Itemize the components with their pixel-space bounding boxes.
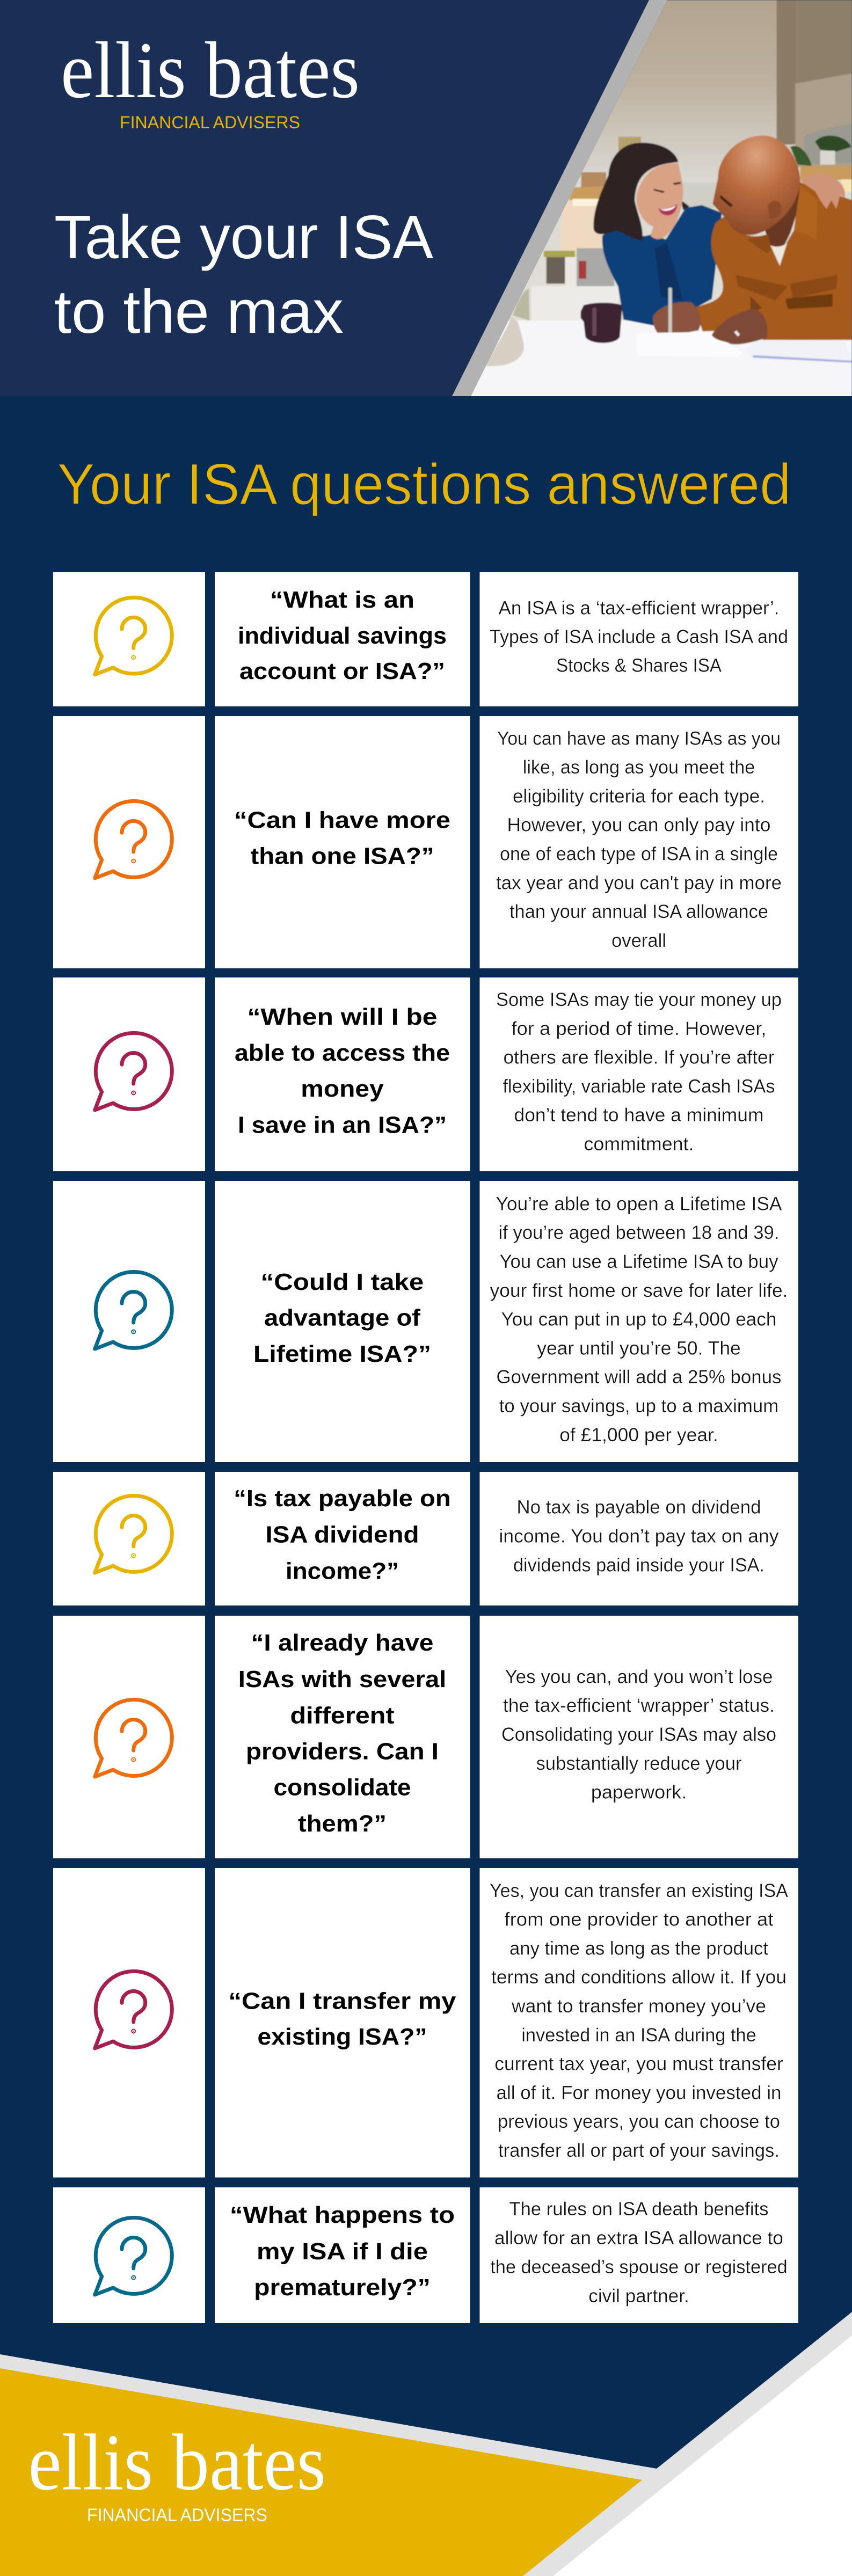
hair (594, 143, 678, 240)
answer 3: commitment. (584, 1134, 694, 1155)
question 7: existing ISA?” (258, 2024, 427, 2050)
panel: question cell 8 (215, 2187, 470, 2323)
answer 8: allow for an extra ISA allowance to (494, 2228, 783, 2249)
answer 3: for a period of time. However, (511, 1018, 767, 1039)
panel: answer cell 6 (480, 1616, 798, 1858)
answer 7: previous years, you can choose to (498, 2111, 780, 2132)
question 4: Lifetime ISA?” (253, 1341, 431, 1367)
answer 7: any time as long as the product (509, 1938, 768, 1959)
title (54, 203, 433, 346)
panel: question cell 1 (215, 572, 470, 706)
question 8: prematurely?” (254, 2274, 431, 2301)
question 4: advantage of (264, 1304, 420, 1331)
row 1 (53, 572, 798, 706)
question 3: I save in an ISA?” (238, 1112, 447, 1138)
question 7: “Can I transfer my (229, 1988, 456, 2015)
question 5: ISA dividend (265, 1522, 419, 1548)
panel: answer cell 5 (480, 1472, 798, 1606)
answer 6: paperwork. (591, 1782, 687, 1803)
row 6 (53, 1616, 798, 1858)
logo: ellis bates financial advisers: FINANCIAL ADVISERS (120, 113, 300, 132)
panel: answer cell 1 (480, 572, 798, 706)
answer 1: Types of ISA include a Cash ISA and (490, 626, 788, 647)
answer 7: invested in an ISA during the (521, 2025, 756, 2046)
footer logo: FINANCIAL ADVISERS (87, 2505, 267, 2525)
question 6: consolidate (274, 1775, 411, 1800)
panel: icon cell 7 (53, 1868, 205, 2177)
answer 7: from one provider to another at (505, 1909, 774, 1930)
answer 4: Government will add a 25% bonus (496, 1367, 782, 1388)
face (636, 163, 683, 239)
answer 7: Yes, you can transfer an existing ISA (490, 1880, 789, 1901)
answer 4: to your savings, up to a maximum (499, 1396, 778, 1417)
question 2: “Can I have more (234, 807, 450, 833)
answer 5 (499, 1497, 779, 1576)
icon: teal question bubble (95, 1272, 172, 1349)
answer 4: You can use a Lifetime ISA to buy (499, 1251, 778, 1272)
question 6: them?” (298, 1811, 387, 1837)
question 2 (234, 807, 450, 870)
answer 2: You can have as many ISAs as you (497, 728, 781, 749)
question 6: providers. Can I (246, 1738, 439, 1765)
section heading: Your ISA questions answered (57, 451, 791, 516)
answer 8 (490, 2199, 788, 2307)
answer 4: your first home or save for later life. (490, 1280, 788, 1301)
answer 4: You can put in up to £4,000 each (501, 1309, 776, 1330)
panel: icon cell 1 (53, 572, 205, 706)
grey diagonal band (452, 0, 667, 396)
answer 7: current tax year, you must transfer (494, 2054, 783, 2075)
woman's hand on shoulder (800, 173, 845, 209)
row 7 (53, 1868, 798, 2177)
answer 8: the deceased’s spouse or registered (490, 2257, 788, 2278)
answer 6 (501, 1666, 776, 1803)
question 6: ISAs with several (238, 1666, 446, 1692)
icon: teal question bubble (95, 2217, 172, 2295)
question 3: “When will I be (247, 1004, 437, 1030)
question 1: “What is an (270, 587, 414, 613)
panel: answer cell 8 (480, 2187, 798, 2323)
answer 3 (496, 989, 782, 1155)
answer 7 (490, 1880, 789, 2161)
other hand (712, 309, 768, 345)
question 1: account or ISA?” (239, 658, 445, 684)
answer 2: However, you can only pay into (507, 815, 771, 836)
blouse (602, 205, 722, 325)
panel: answer cell 2 (480, 716, 798, 968)
question 4 (253, 1269, 431, 1367)
answer 2 (496, 728, 782, 951)
question 3: money (301, 1076, 384, 1102)
icon: crimson question bubble (95, 1033, 172, 1110)
question 5: “Is tax payable on (234, 1485, 451, 1512)
question 4: “Could I take (261, 1269, 424, 1295)
header panel background (0, 0, 852, 396)
question 1: individual savings (238, 623, 447, 649)
panel: question cell 6 (215, 1616, 470, 1858)
question 8: my ISA if I die (257, 2238, 428, 2265)
answer 2: overall (611, 930, 666, 951)
question 3: able to access the (235, 1040, 450, 1066)
writing hand (653, 302, 701, 337)
question 8: “What happens to (230, 2202, 455, 2228)
footer grey band (0, 2312, 852, 2576)
question 3 (235, 1004, 450, 1138)
panel: question cell 3 (215, 977, 470, 1171)
answer 3: Some ISAs may tie your money up (496, 989, 782, 1010)
panel: question cell 5 (215, 1472, 470, 1606)
panel: answer cell 7 (480, 1868, 798, 2177)
answer 3: don’t tend to have a minimum (514, 1105, 763, 1126)
answer 2: like, as long as you meet the (523, 757, 755, 778)
question 2: than one ISA?” (250, 843, 434, 870)
question 8 (230, 2202, 455, 2301)
panel: icon cell 5 (53, 1472, 205, 1606)
mug (581, 303, 622, 343)
answer 8: civil partner. (588, 2286, 689, 2307)
icon: orange question bubble (95, 1699, 172, 1777)
answer 4 (490, 1193, 788, 1446)
title: to the max (54, 278, 344, 346)
answer 5: dividends paid inside your ISA. (513, 1555, 764, 1576)
answer 8: The rules on ISA death benefits (509, 2199, 769, 2220)
question 6: “I already have (251, 1630, 434, 1656)
answer 6: Yes you can, and you won’t lose (505, 1666, 773, 1687)
answer 1: An ISA is a ‘tax-efficient wrapper’. (498, 598, 780, 618)
answer 3: flexibility, variable rate Cash ISAs (503, 1076, 775, 1097)
answer 7: transfer all or part of your savings. (498, 2140, 780, 2161)
footer yellow panel (0, 2368, 642, 2576)
row 8 (53, 2187, 798, 2323)
icon: crimson question bubble (95, 1971, 172, 2048)
answer 7: terms and conditions allow it. If you (491, 1967, 787, 1988)
answer 1: Stocks & Shares ISA (556, 655, 722, 676)
row 5 (53, 1472, 798, 1606)
answer 2: one of each type of ISA in a single (500, 844, 778, 864)
question 7 (229, 1988, 456, 2050)
question 5: income?” (286, 1558, 399, 1585)
panel: answer cell 3 (480, 977, 798, 1171)
panel: icon cell 2 (53, 716, 205, 968)
answer 5: No tax is payable on dividend (516, 1497, 761, 1517)
title: Take your ISA (54, 203, 433, 272)
answer 3: others are flexible. If you’re after (504, 1047, 775, 1068)
answer 6: Consolidating your ISAs may also (501, 1724, 776, 1745)
answer 4: of £1,000 per year. (559, 1425, 718, 1446)
panel: question cell 2 (215, 716, 470, 968)
logo: ellis bates financial advisers: ellis bates (61, 26, 360, 115)
row 4 (53, 1181, 798, 1462)
panel: icon cell 8 (53, 2187, 205, 2323)
answer 2: eligibility criteria for each type. (513, 786, 765, 807)
icon: orange question bubble (95, 801, 172, 878)
answer 4: year until you’re 50. The (537, 1338, 741, 1359)
panel: icon cell 3 (53, 977, 205, 1171)
panel: icon cell 4 (53, 1181, 205, 1462)
question 6 (238, 1630, 446, 1837)
row 3 (53, 977, 798, 1171)
panel: question cell 4 (215, 1181, 470, 1462)
answer 7: want to transfer money you’ve (511, 1996, 766, 2017)
head (712, 135, 800, 235)
answer 4: You’re able to open a Lifetime ISA (496, 1193, 782, 1214)
panel: question cell 7 (215, 1868, 470, 2177)
footer logo: ellis bates (28, 2418, 326, 2507)
question 5 (234, 1485, 451, 1585)
papers (657, 331, 689, 338)
question 1 (238, 587, 447, 684)
panel: icon cell 6 (53, 1616, 205, 1858)
answer 2: than your annual ISA allowance (509, 901, 768, 922)
shirt (695, 183, 852, 340)
icon: yellow question bubble (95, 1495, 172, 1573)
man neck (764, 183, 800, 248)
question 6: different (290, 1703, 395, 1728)
answer 4: if you’re aged between 18 and 39. (498, 1222, 780, 1243)
answer 6: the tax-efficient ‘wrapper’ status. (503, 1695, 775, 1716)
answer 6: substantially reduce your (536, 1753, 742, 1774)
row 2 (53, 716, 798, 968)
panel: answer cell 4 (480, 1181, 798, 1462)
answer 1 (490, 598, 788, 676)
answer 5: income. You don’t pay tax on any (499, 1526, 779, 1547)
header photo: couple at kitchen counter (462, 0, 852, 397)
icon: yellow question bubble (95, 597, 172, 675)
answer 7: all of it. For money you invested in (496, 2082, 782, 2103)
answer 2: tax year and you can't pay in more (496, 872, 782, 893)
